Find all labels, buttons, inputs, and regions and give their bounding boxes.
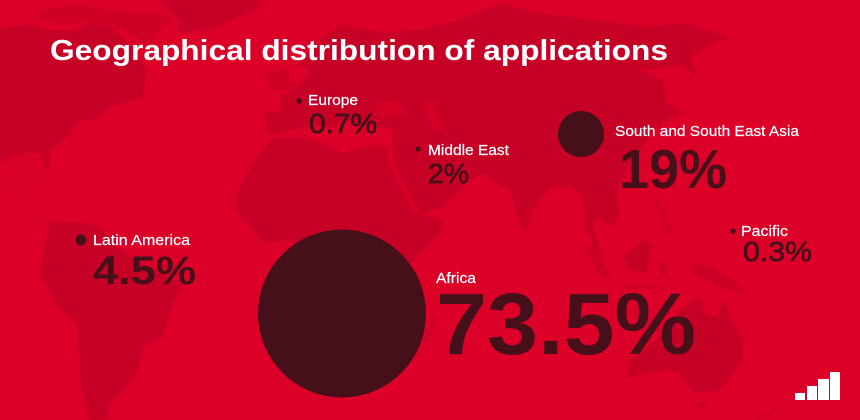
marker: Middle East [415, 146, 421, 152]
map: Central America [0, 153, 50, 232]
map: Black Sea [373, 100, 407, 117]
icon: logo bars [795, 372, 840, 400]
map: Australia [625, 297, 743, 393]
map: Madagascar [423, 313, 436, 345]
region: Pacific [730, 224, 812, 267]
region: Africa [258, 230, 696, 398]
marker: Latin America [76, 234, 86, 246]
marker: Europe [296, 98, 302, 104]
map: New Guinea [690, 263, 748, 295]
value: Europe: 0.7% [309, 108, 377, 139]
map: Africa [237, 138, 443, 395]
map: South America [40, 222, 183, 420]
value: Africa: 73.5% [436, 276, 696, 373]
label: South and South East Asia: South and South East Asia [615, 124, 800, 140]
label: Middle East: Middle East [428, 143, 509, 159]
map: Philippines [653, 197, 673, 238]
map: Sulawesi [657, 262, 668, 278]
title: Geographical distribution of applications [50, 35, 668, 67]
value: Middle East: 2% [428, 158, 469, 189]
region: Europe [296, 93, 377, 139]
map: Borneo [623, 240, 652, 273]
map: Arctic islands [33, 5, 173, 45]
map: New Zealand [753, 398, 790, 420]
map: Eurasia [265, 3, 730, 262]
map: British Isles [265, 68, 296, 90]
map: Caspian Sea [423, 100, 443, 130]
label: Pacific: Pacific [741, 224, 788, 240]
map: Sumatra [582, 243, 610, 279]
marker: South and South East Asia [558, 111, 604, 157]
value: Pacific: 0.3% [743, 236, 812, 267]
map: Java [612, 283, 668, 290]
region: Middle East [415, 143, 509, 189]
map: Tasmania [697, 400, 707, 410]
value: Latin America: 4.5% [93, 249, 196, 293]
map: Scandinavia [295, 35, 345, 72]
label: Latin America: Latin America [93, 233, 191, 249]
region: Latin America [76, 233, 196, 293]
map: North America [0, 22, 147, 170]
label: Europe: Europe [308, 93, 358, 109]
value: South and South East Asia: 19% [619, 138, 727, 200]
marker: Pacific [730, 228, 736, 234]
label: Africa: Africa [436, 271, 477, 287]
region: South and South East Asia [558, 111, 800, 200]
marker: Africa [258, 230, 426, 398]
map: Greenland [160, 0, 260, 33]
